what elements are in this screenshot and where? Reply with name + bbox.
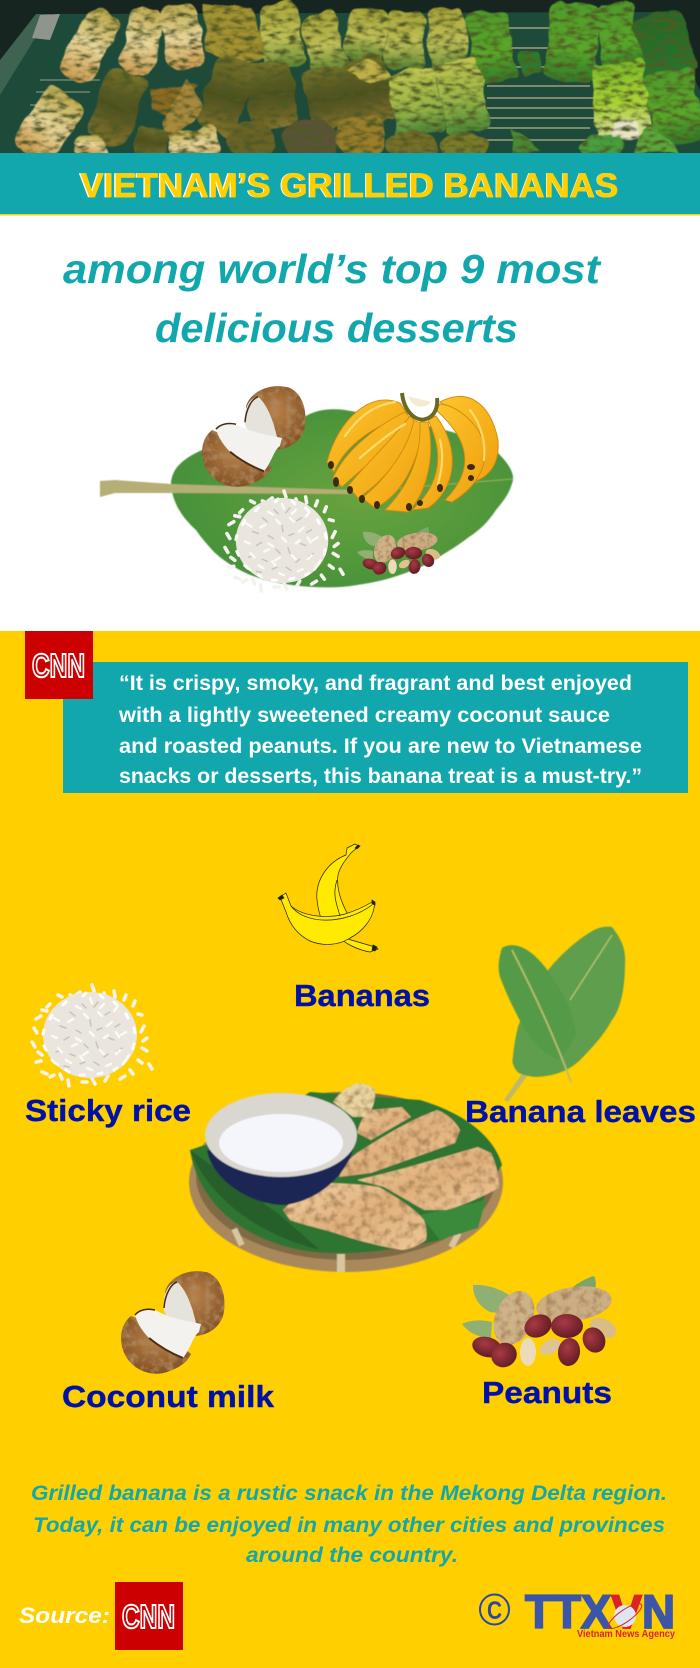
yellow section background xyxy=(0,631,700,1668)
source label: Source: xyxy=(19,1603,110,1628)
label: Banana leaves: Banana leaves xyxy=(465,1094,696,1129)
ingredients on a banana leaf xyxy=(100,386,513,591)
quote text: and roasted peanuts. If you are new to Vietnamese xyxy=(119,735,642,758)
icon: banana leaves xyxy=(499,927,625,1102)
closing note: Grilled banana is a rustic snack in the Mekong Delta region. xyxy=(31,1481,667,1505)
label: Coconut milk: Coconut milk xyxy=(62,1379,275,1414)
quote text: “It is crispy, smoky, and fragrant and best enjoyed xyxy=(119,672,632,695)
label: Bananas: Bananas xyxy=(294,978,430,1013)
label: Peanuts: Peanuts xyxy=(482,1375,612,1410)
quote text: snacks or desserts, this banana treat is a must-try.” xyxy=(119,765,642,788)
CNN logo, quote: CNN xyxy=(32,647,85,684)
banana bunch xyxy=(327,393,498,512)
coconut on leaf xyxy=(202,386,305,487)
agency name: Vietnam News Agency xyxy=(577,1628,675,1640)
label: Sticky rice: Sticky rice xyxy=(25,1093,191,1128)
bowl of coconut sauce xyxy=(207,1150,353,1205)
copyright symbol xyxy=(480,1594,509,1625)
CNN logo, quote xyxy=(25,631,93,699)
icon: peanuts xyxy=(462,1276,619,1372)
subtitle xyxy=(63,246,602,351)
closing note xyxy=(31,1481,667,1567)
rice on leaf xyxy=(225,491,343,591)
title text: VIETNAM’S GRILLED BANANAS xyxy=(80,167,618,205)
closing note: Today, it can be enjoyed in many other cities and provinces xyxy=(33,1513,665,1537)
copyright symbol: C xyxy=(487,1597,502,1625)
leaf xyxy=(100,409,513,587)
green leaf lining xyxy=(190,1092,502,1253)
globe xyxy=(614,1605,636,1627)
bamboo tray xyxy=(189,1092,503,1272)
CNN logo, source: CNN xyxy=(122,1598,175,1635)
icon: coconut milk xyxy=(121,1271,224,1374)
subtitle: among world’s top 9 most xyxy=(63,246,602,292)
title banner: VIETNAM’S GRILLED BANANAS xyxy=(79,167,618,205)
CNN logo, source xyxy=(115,1582,183,1650)
title banner xyxy=(0,153,700,216)
peanuts on leaf xyxy=(357,527,442,577)
TTXVN logo: TTXVN xyxy=(525,1585,675,1638)
header photo: grilled banana parcels on a grill xyxy=(0,0,700,167)
quote text xyxy=(118,672,642,788)
closing note: around the country. xyxy=(246,1543,458,1567)
quote text: with a lightly sweetened creamy coconut sauce xyxy=(118,704,610,727)
icon: sticky rice xyxy=(32,985,152,1086)
quote panel xyxy=(63,662,688,793)
icon: banana illustration xyxy=(278,844,378,952)
subtitle: delicious desserts xyxy=(155,305,518,351)
grilled pieces xyxy=(283,1083,499,1250)
plate of grilled bananas with coconut sauce xyxy=(189,1083,503,1272)
